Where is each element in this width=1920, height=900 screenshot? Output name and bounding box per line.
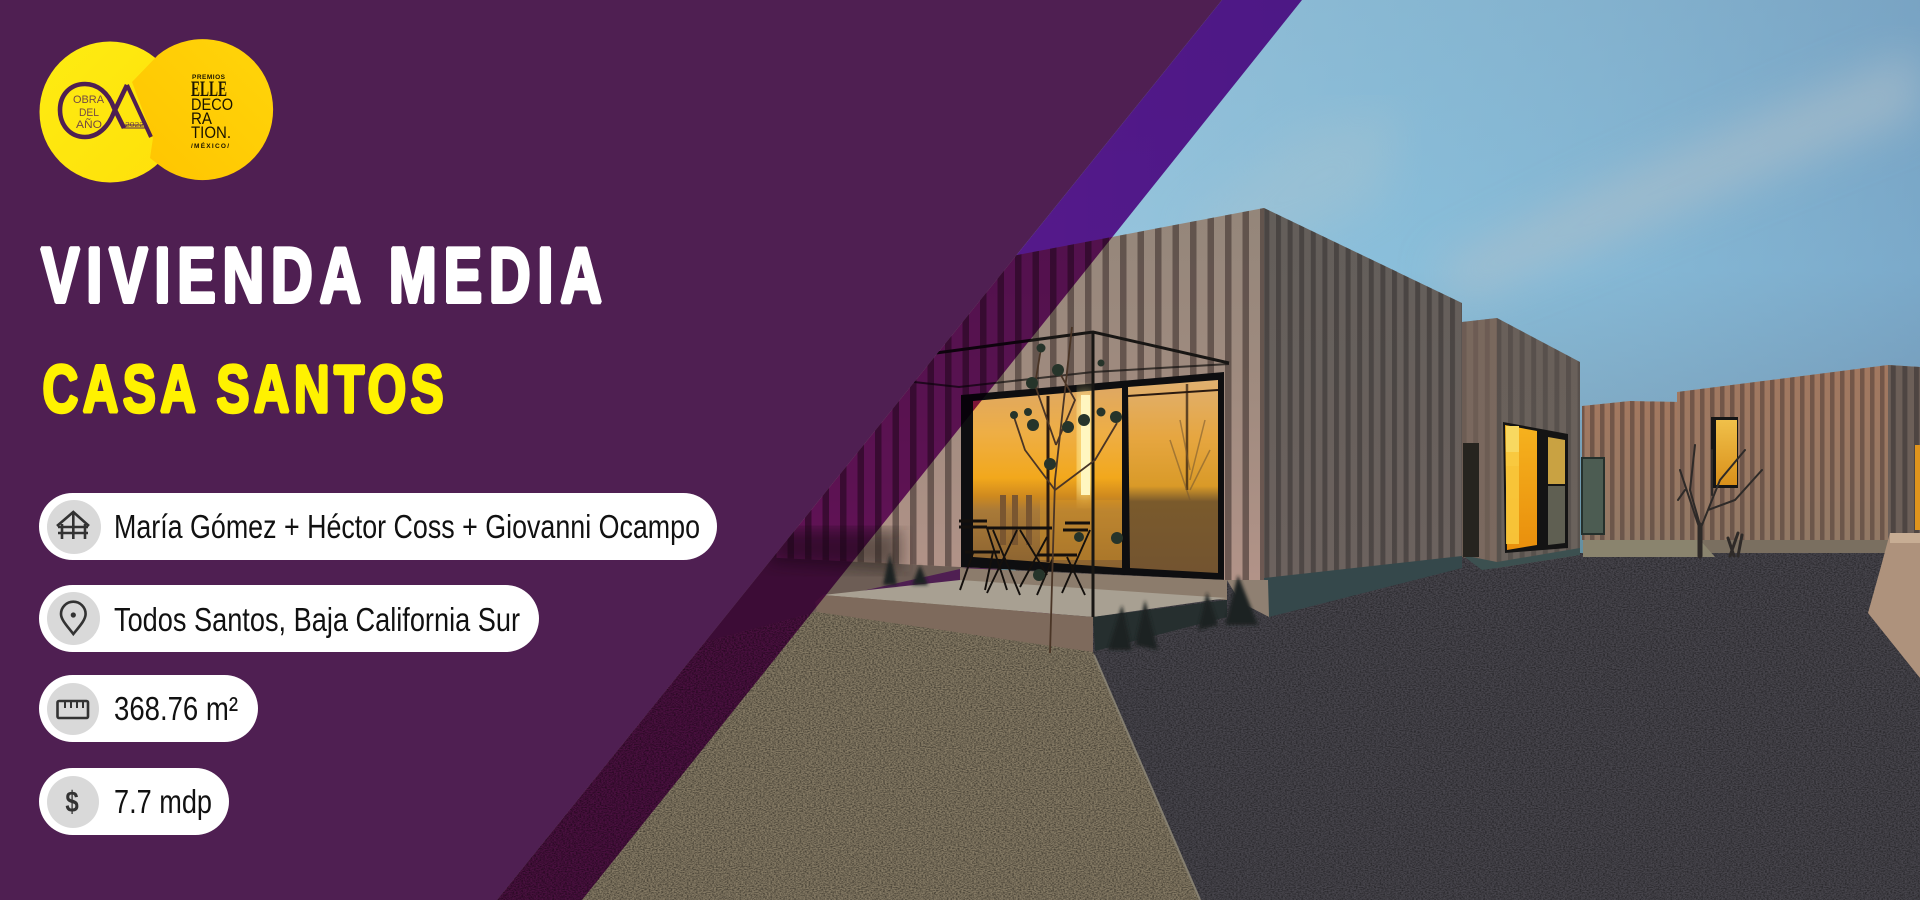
- logo: Obra del Año and Premios Elle Decoration: [40, 39, 273, 183]
- wing base: [1462, 548, 1580, 570]
- text: architects names: María Gómez + Héctor Coss + Giovanni Ocampo: [114, 508, 700, 545]
- OA lettering: DEL: [79, 107, 99, 119]
- main left face: [760, 208, 1264, 580]
- patio slab: [815, 580, 1227, 652]
- icon: ruler: [58, 701, 88, 718]
- info pill: location: [39, 585, 539, 652]
- OA lettering: OBRA: [73, 94, 105, 106]
- far window: [1711, 417, 1738, 488]
- OA monogram: [60, 84, 151, 137]
- picture window: [961, 372, 1224, 580]
- OA lettering: 2022: [125, 122, 144, 129]
- bare tree: [1678, 445, 1762, 556]
- main right face: [1264, 208, 1462, 580]
- wing window: [1503, 422, 1568, 553]
- Elle Decoration lettering: TION.: [191, 124, 231, 142]
- wing door: [1463, 443, 1479, 557]
- Elle Decoration lettering: ELLE: [191, 76, 227, 101]
- info pill: area: [39, 675, 258, 742]
- far buildings: [1582, 365, 1920, 545]
- translucent purple diagonal band: [497, 0, 1302, 900]
- sky: [1000, 0, 1920, 600]
- pergola post: [1092, 332, 1094, 617]
- Elle Decoration lettering: RA: [191, 110, 212, 128]
- main base: [1264, 556, 1462, 617]
- Elle Decoration lettering: [191, 74, 233, 150]
- Elle Decoration lettering: DECO: [191, 96, 233, 114]
- young tree: [1010, 327, 1123, 653]
- info pill: architects: [39, 493, 717, 560]
- OA lettering: [73, 94, 144, 131]
- panel: architectural photograph: [480, 0, 1920, 900]
- panel: solid purple diagonal: [0, 0, 1222, 900]
- patio step: [960, 568, 1227, 600]
- title: Vivienda Media: VIVIENDA MEDIA: [41, 232, 602, 319]
- text: budget: 7.7 mdp: [114, 783, 212, 820]
- icon: dollar: $: [65, 784, 79, 819]
- text: location: Todos Santos, Baja California Sur: [114, 601, 520, 638]
- Elle Decoration lettering: /MÉXICO/: [191, 141, 229, 150]
- pergola frame: [914, 332, 1229, 387]
- subtitle: Casa Santos: CASA SANTOS: [42, 353, 444, 427]
- logo circle left: [40, 42, 180, 182]
- info pill: budget: [39, 768, 229, 835]
- planter: [1583, 540, 1715, 557]
- main volume: [760, 208, 1462, 653]
- ground: dark gravel and sand: [480, 540, 1920, 900]
- OA lettering: AÑO: [76, 118, 102, 131]
- icon: house: [57, 512, 89, 539]
- bistro table and chairs: [959, 521, 1090, 595]
- far door: [1582, 458, 1604, 534]
- logo circle right: [132, 39, 273, 180]
- text: area: 368.76 m²: [114, 690, 238, 727]
- icon: map pin: [61, 602, 86, 634]
- low wall at right: [1868, 533, 1920, 678]
- wing building: [1462, 318, 1580, 570]
- Elle Decoration lettering: PREMIOS: [192, 74, 226, 81]
- shrubs: [883, 553, 1258, 650]
